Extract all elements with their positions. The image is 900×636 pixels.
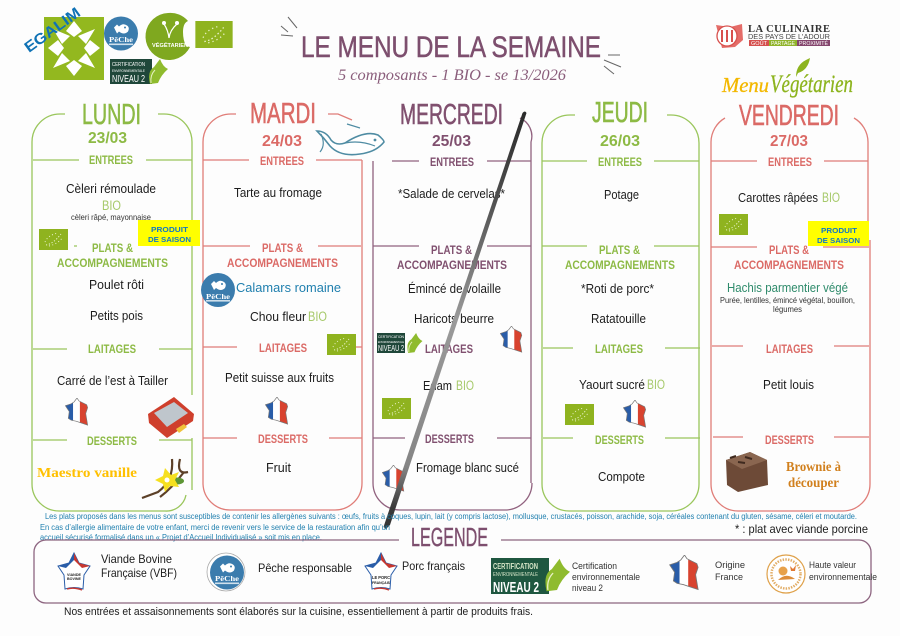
legend item: viande bovine: BOVINE (67, 577, 82, 581)
logo: végétarien (145, 13, 190, 60)
plat items (236, 280, 341, 324)
badge: produit de saison: DE SAISON (148, 235, 191, 244)
date: 23/03 (88, 130, 127, 147)
dessert item: Brownie à (786, 459, 841, 474)
menu végétarien label: Végétarien (770, 71, 853, 98)
allergen notice: En cas d’allergie alimentaire de votre enfant, merci de revenir vers le service de la restauration afin qu’un (40, 523, 390, 532)
icon: origine France (265, 397, 289, 426)
section: plats (734, 243, 844, 272)
logo: EGalim: EGALIM (21, 4, 84, 56)
image: vanille (142, 459, 188, 498)
day title: MERCREDI (400, 99, 503, 131)
badge: produit de saison (808, 221, 869, 246)
icon: bio (719, 214, 748, 235)
entrée item: Tarte au fromage (234, 185, 322, 200)
allergen notice: Les plats proposés dans les menus sont susceptibles de contenir les allergènes suivants : œufs, fruits à coques, lupin, lait (y compris lactose), mollusque, crustacés, poisson, arachide, soja, céréales contenant du gluten, sésame, céleri et moutarde. (45, 512, 857, 521)
panel: mardi (201, 98, 362, 510)
icon: fish (317, 124, 384, 155)
legend item: certification niveau 2: niveau 2 (572, 583, 603, 593)
legend item: pêche responsable (207, 553, 352, 591)
legend item: haute valeur environnementale (767, 555, 877, 593)
plat items: Petits pois (90, 308, 143, 323)
icon: origine France (623, 400, 647, 429)
legend item: pêche responsable: Pêche responsable (258, 561, 352, 575)
logo: certification environnementale niveau 2 (110, 59, 168, 85)
plat items (89, 277, 144, 323)
section: plats: PLATS & (769, 243, 809, 257)
laitage item: Carré de l’est à Tailler (57, 373, 169, 388)
legend item: haute valeur environnementale: environnementale (809, 572, 877, 582)
section: plats: ACCOMPAGNEMENTS (565, 258, 675, 272)
section: entrées: ENTREES (430, 155, 474, 169)
allergen notice: accueil sécurisé formalisé dans un « Projet d’Accueil Individualisé » soit mis en place. (40, 533, 322, 542)
section: laitages: LAITAGES (766, 342, 813, 356)
section: desserts: DESSERTS (87, 434, 137, 448)
title block (281, 17, 621, 84)
legend title: LEGENDE (411, 522, 488, 552)
plat items (581, 281, 654, 326)
section: plats (227, 241, 338, 270)
section: desserts: DESSERTS (595, 433, 644, 447)
icon: bio (39, 229, 68, 250)
dessert item: Maestro vanille (37, 465, 137, 480)
icon: bio (382, 398, 411, 419)
date: 25/03 (432, 133, 471, 150)
legend item: certification niveau 2 (491, 558, 640, 596)
section: laitages: LAITAGES (595, 342, 643, 356)
logo: bio européen (195, 21, 233, 48)
panel frame (32, 114, 192, 511)
legend item: pêche responsable: PêChe (215, 574, 240, 583)
legend item: viande bovine: VIANDE (67, 573, 82, 577)
laitage item: BIO (647, 377, 665, 392)
entrée item: *Salade de cervelas* (398, 186, 505, 201)
laitage item: Petit suisse aux fruits (225, 370, 334, 385)
logo: La Culinaire des Pays de l'Adour: GOÛT (751, 40, 767, 47)
panel: mercredi (373, 99, 532, 510)
logo: La Culinaire des Pays de l'Adour: DES PAYS DE L'ADOUR (748, 34, 830, 41)
icon: pêche responsable (201, 273, 235, 307)
section: laitages: LAITAGES (425, 342, 473, 356)
dessert item: découper (788, 475, 839, 490)
section: plats (397, 243, 507, 272)
icon: origine France (65, 398, 89, 427)
icon: bio (565, 404, 594, 425)
dessert item: Compote (598, 469, 645, 484)
day title: LUNDI (82, 99, 141, 131)
legend item: origine France: France (715, 572, 743, 583)
entrée item: cèleri râpé, mayonnaise (71, 212, 151, 222)
entrée item (66, 181, 156, 222)
logo: La Culinaire des Pays de l'Adour: PARTAGE (771, 41, 796, 47)
legend item: porc français: FRANÇAIS (372, 581, 391, 585)
section: entrées: ENTREES (89, 153, 133, 167)
icon: certification niveau 2: ENVIRONNEMENTALE (378, 340, 404, 344)
date: 24/03 (262, 133, 302, 150)
legend item: viande bovine: Française (VBF) (101, 566, 177, 580)
laitage item (423, 378, 474, 393)
section: entrées: ENTREES (260, 154, 304, 168)
badge: produit de saison (138, 220, 200, 246)
panel: vendredi (711, 100, 870, 511)
legend item: certification niveau 2: environnementale (572, 572, 640, 582)
panel: jeudi (542, 97, 700, 511)
panel frame (711, 118, 870, 511)
badge: produit de saison: PRODUIT (151, 225, 188, 234)
logo: certification environnementale niveau 2: ENVIRONNEMENTALE (112, 69, 146, 73)
laitage item: Edam (423, 378, 452, 393)
section: plats: PLATS & (431, 243, 472, 257)
plat item: Purée, lentilles, émincé végétal, bouillon, (720, 295, 855, 305)
accent strokes (281, 17, 621, 74)
icon: certification niveau 2: NIVEAU 2 (378, 344, 404, 353)
icon: certification niveau 2 (377, 333, 422, 353)
icon: bio (327, 334, 356, 355)
date: 27/03 (770, 133, 808, 150)
entrée item: Cèleri rémoulade (66, 181, 156, 196)
legend (34, 522, 877, 603)
plat item: Hachis parmentier végé (727, 280, 848, 295)
entrée item: BIO (822, 190, 840, 205)
logo: La Culinaire des Pays de l'Adour: PROXIMITÉ (799, 40, 829, 47)
note: viande porcine: * : plat avec viande porcine (735, 522, 868, 536)
title: LE MENU DE LA SEMAINE (301, 31, 601, 64)
logos: labels top left (21, 4, 233, 85)
dessert item: Fromage blanc sucé (416, 460, 519, 475)
section: entrées: ENTREES (598, 155, 642, 169)
logo: La Culinaire des Pays de l'Adour (716, 24, 830, 48)
logo: pêche responsable (104, 16, 138, 50)
plat item (720, 280, 855, 314)
laitage item: Yaourt sucré (579, 377, 645, 392)
legend item: porc français: LE PORC (372, 575, 391, 580)
logo: certification environnementale niveau 2: NIVEAU 2 (112, 74, 145, 85)
laitage item: Petit louis (763, 377, 814, 392)
icon: certification niveau 2: CERTIFICATION (378, 334, 404, 339)
logo: pêche responsable: PêChe (109, 35, 134, 44)
section: desserts: DESSERTS (765, 433, 814, 447)
section: plats: PLATS & (92, 241, 133, 255)
plat items: *Roti de porc* (581, 281, 654, 296)
laitage item: BIO (456, 378, 474, 393)
pencil stroke across mercredi (384, 112, 526, 529)
section: plats: PLATS & (262, 241, 303, 255)
logo: certification environnementale niveau 2: CERTIFICATION (112, 62, 145, 68)
section: desserts: DESSERTS (425, 432, 474, 446)
section: plats: ACCOMPAGNEMENTS (397, 258, 507, 272)
allergen notice (40, 512, 857, 542)
logo: végétarien: VÉGÉTARIEN (152, 41, 188, 49)
entrée item: BIO (102, 198, 121, 213)
section: plats: ACCOMPAGNEMENTS (734, 258, 844, 272)
plat items: Chou fleur (250, 309, 307, 324)
dessert item: Fruit (266, 460, 291, 475)
legend item: haute valeur environnementale: Haute valeur (809, 560, 856, 570)
legend item: porc français (365, 553, 465, 590)
badge: produit de saison: PRODUIT (821, 226, 857, 235)
plat items: Calamars romaine (236, 280, 341, 295)
section: entrées: ENTREES (768, 155, 812, 169)
plat items: Émincé de volaille (408, 281, 501, 296)
panel frame (542, 115, 700, 511)
section: plats (565, 243, 675, 272)
date: 26/03 (600, 133, 640, 150)
panel frame (373, 118, 532, 510)
legend item: certification niveau 2: NIVEAU 2 (493, 579, 539, 596)
legend item: origine France (670, 555, 745, 592)
icon: origine France (500, 326, 523, 354)
section: plats: ACCOMPAGNEMENTS (227, 256, 338, 270)
section: laitages: LAITAGES (88, 342, 136, 356)
image: brownie (726, 452, 768, 492)
legend item: certification niveau 2: CERTIFICATION (493, 562, 538, 571)
plat items (408, 281, 501, 326)
logo: La Culinaire des Pays de l'Adour: LA CULINAIRE (748, 24, 830, 35)
legend item: porc français: Porc français (402, 559, 465, 573)
menu végétarien label (721, 58, 853, 98)
menu végétarien label: Menu (721, 73, 769, 97)
dessert item (786, 459, 841, 490)
day title: VENDREDI (739, 100, 839, 132)
icon: pêche responsable: PêChe (206, 292, 231, 301)
plat items: Haricots beurre (414, 311, 494, 326)
section: plats (57, 241, 168, 270)
legend item: certification niveau 2: ENVIRONNEMENTALE (493, 572, 538, 578)
plat items: Poulet rôti (89, 277, 144, 292)
badge: produit de saison: DE SAISON (817, 236, 860, 245)
legend item: viande bovine (58, 552, 177, 590)
plat item: légumes (773, 304, 802, 314)
section: laitages: LAITAGES (259, 341, 307, 355)
logo: EGalim (21, 4, 104, 80)
entrée item: Potage (604, 187, 639, 202)
legend item: viande bovine: Viande Bovine (101, 552, 172, 566)
plat items: BIO (308, 309, 327, 324)
day title: JEUDI (592, 97, 648, 129)
day title: MARDI (250, 98, 316, 130)
section: plats: ACCOMPAGNEMENTS (57, 256, 168, 270)
panel frame (203, 114, 362, 510)
legend item: certification niveau 2: Certification (572, 561, 617, 571)
legend frame (34, 540, 871, 603)
legend item: origine France: Origine (715, 560, 745, 571)
icon: origine France (382, 465, 405, 493)
image: carré de l'est (148, 397, 194, 438)
footer note: Nos entrées et assaisonnements sont élaborés sur la cuisine, essentiellement à partir de produits frais. (64, 606, 533, 618)
section: plats: PLATS & (599, 243, 640, 257)
panel: lundi (32, 99, 200, 511)
subtitle: 5 composants - 1 BIO - se 13/2026 (338, 67, 566, 84)
plat items: Ratatouille (591, 311, 646, 326)
section: desserts: DESSERTS (258, 432, 308, 446)
entrée item: Carottes râpées (738, 190, 818, 205)
